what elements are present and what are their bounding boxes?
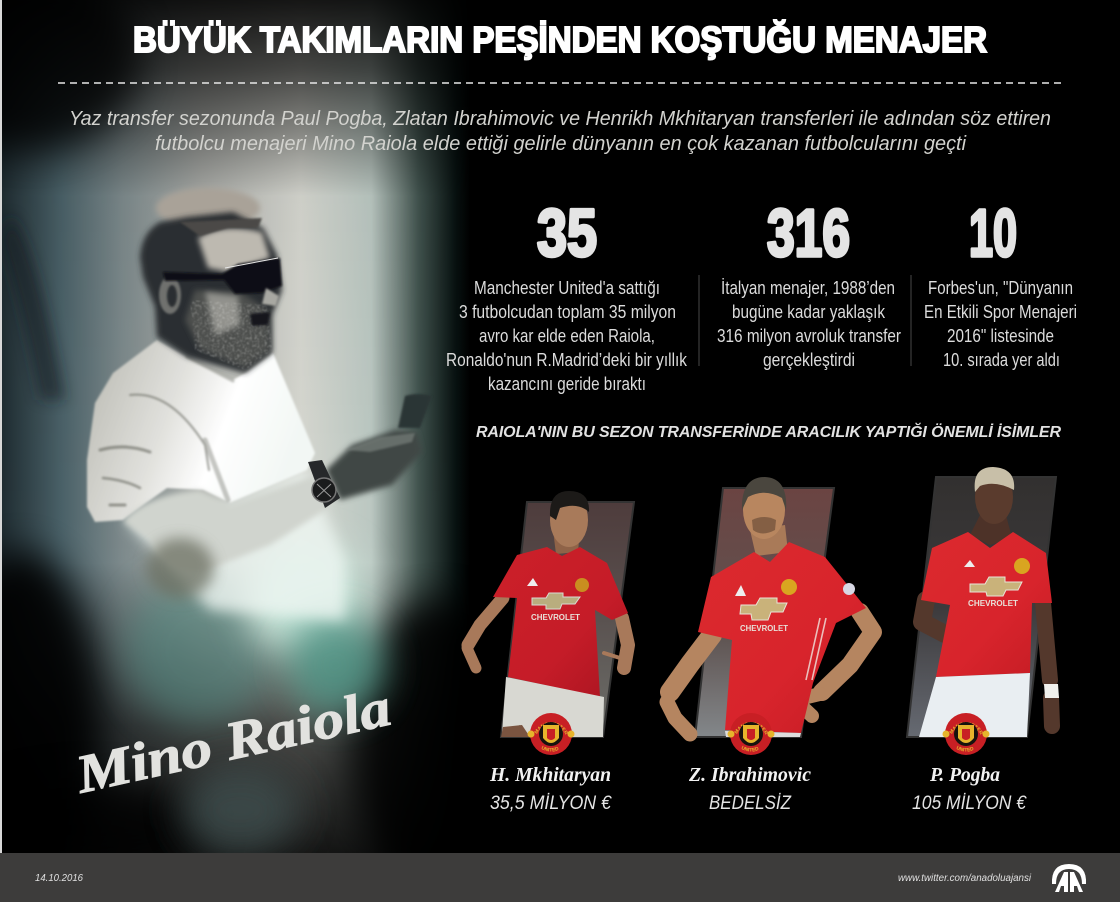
stat: 316 (717, 196, 901, 370)
neck and head (553, 530, 580, 554)
panel: portrait background glow (2, 0, 463, 853)
phone (398, 394, 432, 428)
sponsor (740, 598, 788, 633)
stat: 35: kazancını geride bıraktı (488, 374, 646, 394)
jersey (921, 532, 1052, 677)
stat: 316: 316 (767, 196, 850, 271)
intro text (69, 108, 1051, 155)
crest: Pogba (942, 713, 990, 755)
shirt (87, 340, 315, 522)
stat: 10: 10. sırada yer aldı (943, 350, 1060, 370)
stat: 35: avro kar elde eden Raiola, (479, 326, 655, 346)
label: H. Mkhitaryan: H. Mkhitaryan (489, 764, 611, 786)
jersey (698, 542, 866, 733)
forearm (123, 476, 333, 571)
bald crown haze (156, 188, 260, 228)
stat: 10 (924, 196, 1077, 370)
shirt folds (100, 357, 233, 505)
crest: Ibrahimovic (728, 713, 774, 755)
label: H. Mkhitaryan (489, 764, 612, 814)
ear (159, 276, 181, 314)
torso lower fade (125, 470, 345, 620)
crest: Pogba: MANCHESTER (949, 722, 983, 735)
stat: 10: Forbes'un, "Dünyanın (928, 278, 1073, 298)
stat: 35: Manchester United'a sattığı (474, 278, 660, 298)
shorts (502, 677, 604, 737)
cheek (185, 290, 270, 368)
stat: 316: İtalyan menajer, 1988’den (721, 278, 895, 298)
arms (922, 600, 1052, 726)
stat: 35: 3 futbolcudan toplam 35 milyon (459, 302, 676, 322)
portrait: Mino Raiola (87, 188, 432, 620)
crest: Mkhitaryan: MANCHESTER (534, 722, 568, 735)
sponsor: CHEVROLET (740, 624, 788, 633)
jersey (493, 547, 628, 697)
shorts band (725, 731, 801, 737)
label: P. Pogba (912, 764, 1027, 814)
neck and head (970, 515, 1012, 545)
stat: 35: 35 (537, 196, 597, 271)
stat: 10: En Etkili Spor Menajeri (924, 302, 1077, 322)
footer (0, 853, 1120, 902)
sponsor (968, 577, 1022, 608)
dashed divider (58, 82, 1064, 84)
crest: Mkhitaryan (528, 713, 574, 755)
shorts (919, 673, 1030, 737)
date: 14.10.2016 (35, 873, 83, 884)
sponsor: CHEVROLET (531, 613, 580, 622)
source url: www.twitter.com/anadoluajansi (898, 873, 1032, 884)
icon: AA logo (1052, 864, 1086, 892)
stat: 316: 316 milyon avroluk transfer (717, 326, 901, 346)
crest: Mkhitaryan: UNITED (542, 746, 558, 752)
sunglasses (163, 258, 282, 294)
label: Z. Ibrahimovic (688, 764, 811, 814)
section heading: RAIOLA'NIN BU SEZON TRANSFERİNDE ARACILIK YAPTIĞI ÖNEMLİ İSİMLER (476, 422, 1061, 441)
player: Z. Ibrahimovic (667, 477, 873, 737)
watch (308, 460, 340, 508)
intro text: futbolcu menajeri Mino Raiola elde ettiği gelirle dünyanın en çok kazanan futbolcularını geçti (155, 133, 967, 155)
intro text: Yaz transfer sezonunda Paul Pogba, Zlatan Ibrahimovic ve Henrikh Mkhitaryan transferleri ile adından söz ettiren (69, 108, 1051, 130)
crest: Ibrahimovic: MANCHESTER (734, 722, 768, 735)
left edge line (0, 0, 2, 853)
label: P. Pogba: P. Pogba (929, 764, 1000, 786)
hand (326, 430, 422, 500)
head (140, 212, 282, 373)
forehead (198, 228, 270, 272)
arms (667, 612, 873, 734)
stat: 316: gerçekleştirdi (763, 350, 855, 370)
nose (262, 288, 279, 306)
label: H. Mkhitaryan: 35,5 MİLYON € (490, 793, 612, 814)
brow shadow and hair top (180, 218, 262, 236)
sponsor: CHEVROLET (968, 599, 1018, 608)
label: Z. Ibrahimovic: BEDELSİZ (709, 793, 792, 814)
stat: 10: 2016" listesinde (947, 326, 1054, 346)
stat: 10: 10 (969, 196, 1017, 271)
crest: Pogba: UNITED (956, 746, 974, 752)
photo panel (501, 502, 634, 737)
neck and head (750, 525, 788, 556)
player: P. Pogba (907, 467, 1059, 737)
stubble (190, 300, 272, 370)
stat: 35: Ronaldo'nun R.Madrid’deki bir yıllık (446, 350, 688, 370)
player: H. Mkhitaryan (467, 491, 634, 737)
sponsor (531, 593, 580, 622)
crest: Ibrahimovic: UNITED (742, 746, 758, 752)
arms (467, 598, 628, 668)
label: Z. Ibrahimovic: Z. Ibrahimovic (688, 764, 811, 786)
stat: 316: bugüne kadar yaklaşık (732, 302, 886, 322)
signature: Mino Raiola: Mino Raiola (69, 677, 396, 805)
title: BÜYÜK TAKIMLARIN PEŞİNDEN KOŞTUĞU MENAJER (133, 19, 987, 60)
label: P. Pogba: 105 MİLYON € (912, 793, 1027, 814)
stat: 35 (446, 196, 688, 394)
